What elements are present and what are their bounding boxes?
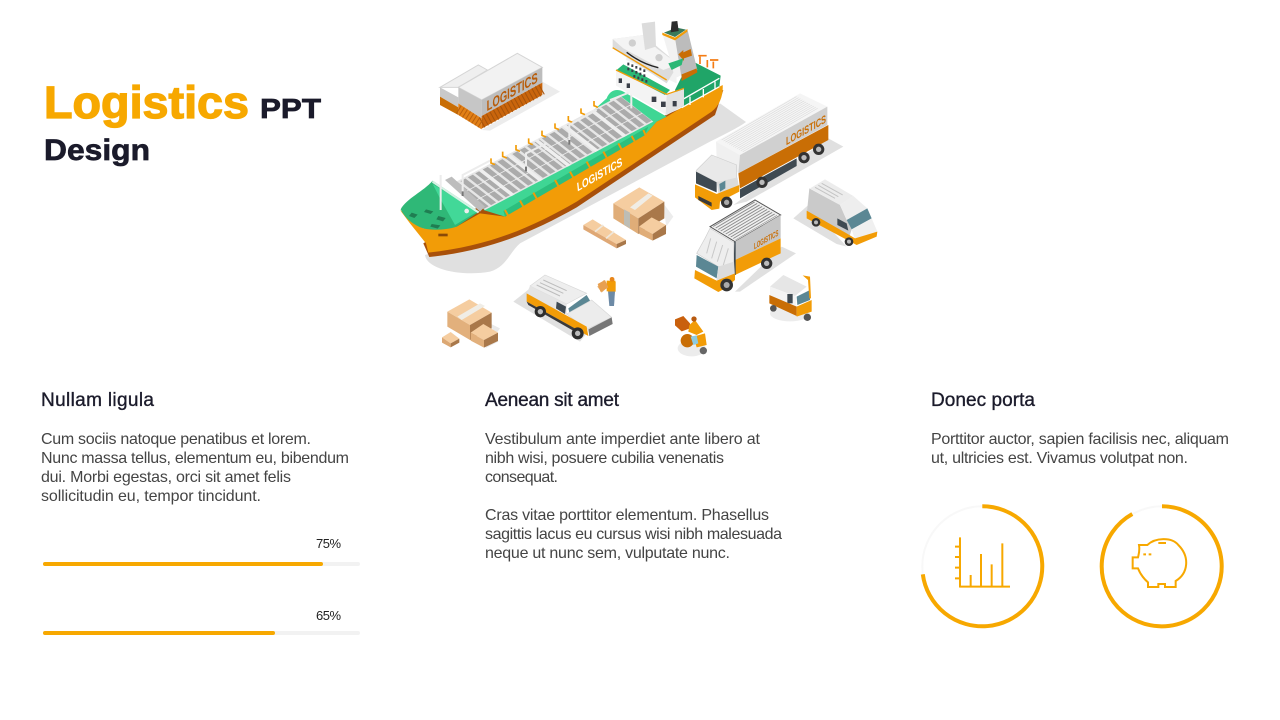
column 1: Nullam ligula: Nunc massa tellus, elementum eu, bibendum <box>41 450 349 467</box>
large truck, delivery truck, van, tuk-tuk, boxes, courier <box>583 93 877 321</box>
column 2: Aenean sit amet: Aenean sit amet <box>485 390 620 411</box>
stacked boxes <box>442 299 500 348</box>
cargo ship <box>400 85 746 273</box>
delivery truck: LOGISTICS <box>754 227 778 251</box>
column 1: Nullam ligula <box>41 390 349 505</box>
tuk-tuk <box>769 275 812 321</box>
delivery person <box>597 277 615 306</box>
title: Design <box>44 134 150 167</box>
shipping containers: LOGISTICS <box>487 70 538 115</box>
scooter courier <box>675 316 707 356</box>
ship superstructure <box>613 21 721 116</box>
column 2: Aenean sit amet: Cras vitae porttitor elementum. Phasellus <box>485 507 769 524</box>
progress bar 75% <box>43 536 360 566</box>
column 2: Aenean sit amet <box>485 390 782 562</box>
title: PPT <box>260 93 321 124</box>
cargo ship: LOGISTICS <box>576 154 623 195</box>
column 2: Aenean sit amet: neque ut nunc sem, vulputate nunc. <box>485 545 730 562</box>
column 1: Nullam ligula: sollicitudin eu, tempor tincidunt. <box>41 488 261 505</box>
shipping containers <box>440 53 560 131</box>
column 3: Donec porta: ut, ultricies est. Vivamus volutpat non. <box>931 450 1188 467</box>
ring gauge: piggy bank icon <box>1102 506 1222 626</box>
large truck <box>695 93 843 210</box>
person with box <box>598 277 616 305</box>
pickup car <box>513 275 613 342</box>
column 2: Aenean sit amet: sagittis lacus eu cursus wisi nibh malesuada <box>485 526 782 543</box>
boxes <box>583 187 673 248</box>
illustration: logistics fleet <box>400 21 877 356</box>
progress bar 65%: 65% <box>316 608 341 623</box>
column 3: Donec porta <box>931 390 1229 467</box>
title: Logistics <box>44 77 249 128</box>
title <box>44 77 321 167</box>
large truck: LOGISTICS <box>786 113 826 148</box>
column 1: Nullam ligula: dui. Morbi egestas, orci sit amet felis <box>41 469 291 486</box>
column 2: Aenean sit amet: consequat. <box>485 469 558 486</box>
column 1: Nullam ligula: Cum sociis natoque penatibus et lorem. <box>41 431 311 448</box>
delivery truck <box>694 200 796 292</box>
column 3: Donec porta: Donec porta <box>931 390 1035 411</box>
progress bar 65% <box>43 608 360 635</box>
progress bar 75%: 75% <box>316 536 341 551</box>
column 2: Aenean sit amet: nibh wisi, posuere cubilia venenatis <box>485 450 724 467</box>
van <box>793 179 877 247</box>
column 3: Donec porta: Porttitor auctor, sapien facilisis nec, aliquam <box>931 431 1229 448</box>
ring gauge: bar chart icon <box>922 506 1042 626</box>
column 1: Nullam ligula: Nullam ligula <box>41 390 154 411</box>
car, boxes and scooter <box>442 275 707 356</box>
column 2: Aenean sit amet: Vestibulum ante imperdiet ante libero at <box>485 431 761 448</box>
